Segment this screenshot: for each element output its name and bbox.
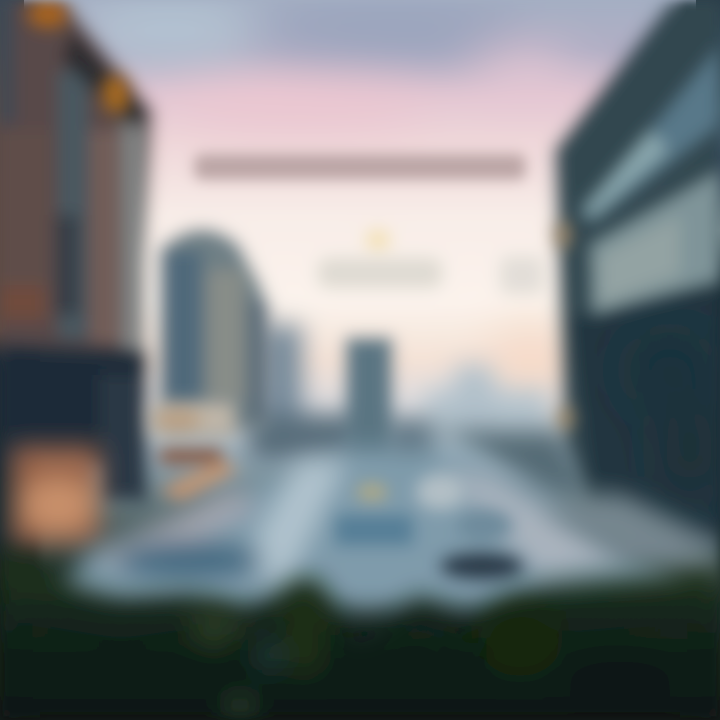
orange storefront <box>12 446 100 544</box>
left building orange roof accents <box>28 0 130 114</box>
blurred headline band <box>194 154 526 180</box>
right building <box>555 0 720 560</box>
centre plaza <box>335 474 524 580</box>
horizon shadow band <box>250 415 590 500</box>
right building upper glass panel <box>580 45 720 222</box>
left building <box>0 0 152 370</box>
blurred logo mark <box>366 230 390 250</box>
distant buildings <box>262 325 550 475</box>
blurred side sign <box>500 256 544 294</box>
right building lower glass panel <box>590 170 720 315</box>
foreground foliage clumps <box>0 584 720 720</box>
foreground foliage <box>0 555 720 720</box>
left lower dark block <box>0 345 146 505</box>
roadside pavilion <box>150 402 240 500</box>
right foreground road <box>540 495 720 585</box>
blurred logo wordmark <box>318 258 442 288</box>
middle tower <box>160 230 268 430</box>
central tower <box>346 338 392 463</box>
warm accent lights on right building <box>554 221 572 430</box>
street surface <box>60 450 700 610</box>
right building window tint <box>630 335 715 500</box>
